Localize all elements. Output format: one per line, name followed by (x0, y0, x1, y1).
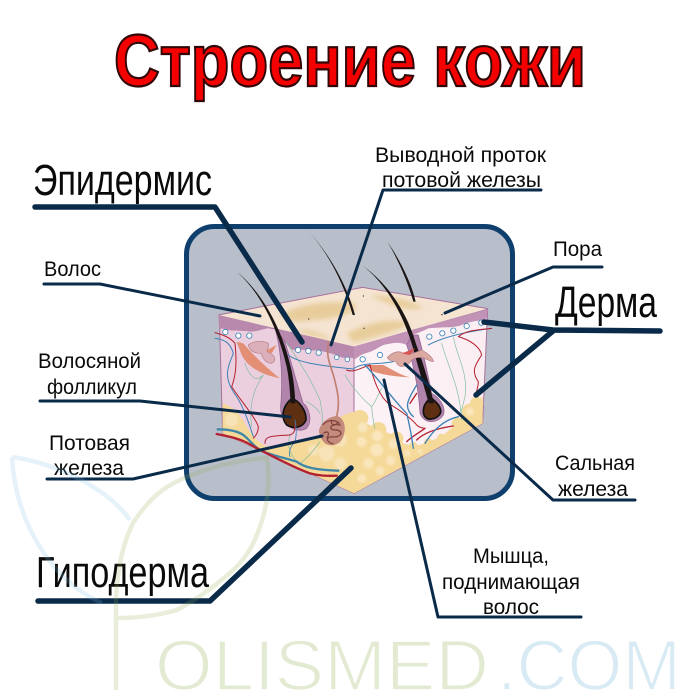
sweat duct (328, 342, 338, 417)
upper arteries (215, 328, 492, 443)
leader: hair follicle (40, 401, 290, 417)
sebaceous gland right (387, 350, 433, 366)
label: pore: Пора (553, 238, 602, 261)
tan skin patches (280, 295, 423, 343)
left hair shaft (235, 270, 295, 403)
top edge line (218, 287, 488, 315)
label: arrector muscle: волос (483, 596, 539, 619)
label: arrector muscle: поднимающая (442, 571, 580, 594)
heading: hypodermis: Гиподерма (36, 548, 209, 597)
label: sweat duct: потовой железы (382, 169, 541, 192)
watermark: logo leaves (12, 457, 268, 690)
label: hair follicle: фолликул (47, 376, 137, 399)
title: Строение кожи (114, 21, 586, 102)
watermark: site name (155, 627, 681, 700)
label: sweat gland: железа (54, 457, 124, 480)
left face hypodermis fat (223, 403, 354, 493)
left epidermis band (218, 315, 354, 358)
top face of skin (218, 287, 488, 347)
label: hair: Волос (44, 258, 101, 281)
right face dermis (354, 309, 488, 493)
lower left vein (289, 420, 296, 457)
label: sebaceous gland: железа (558, 478, 628, 501)
heading: dermis: Дерма (555, 278, 657, 327)
right face hypodermis fat (352, 397, 483, 493)
left follicle bulb (283, 400, 306, 427)
right follicle bulb (423, 398, 441, 419)
leader: hypodermis (38, 468, 351, 601)
right hair follicle (407, 335, 444, 422)
left face dermis (219, 317, 354, 493)
leader: arrector muscle (384, 380, 581, 617)
blood vessels and nerves (215, 320, 492, 476)
label: arrector muscle: Мышца, (473, 545, 549, 568)
heading: epidermis: Эпидермис (33, 156, 212, 205)
right epidermis band (354, 309, 488, 360)
large red vessel (217, 434, 337, 476)
left hair follicle (275, 328, 310, 430)
leader: epidermis (35, 207, 302, 342)
green nerves (245, 337, 466, 463)
leader: pore (445, 267, 602, 313)
label: sweat duct: Выводной проток (375, 144, 547, 167)
capillary loops (223, 320, 484, 362)
label: hair follicle: Волосяной (38, 350, 141, 373)
left fat lobules (225, 413, 347, 469)
large blue vessel (218, 429, 338, 471)
skin cross-section block (215, 229, 492, 493)
leader: sebaceous gland (405, 364, 635, 500)
leader: dermis (476, 322, 660, 395)
back hair shafts (307, 229, 416, 315)
lower right arteries (407, 393, 453, 442)
lower right veins (365, 365, 458, 448)
label: sweat gland: Потовая (49, 432, 130, 455)
upper veins (215, 328, 492, 437)
pores (308, 295, 443, 329)
leader lines (35, 190, 660, 617)
right hair shaft (362, 265, 434, 403)
leader: hair (44, 284, 260, 316)
panel: skin diagram background (186, 226, 512, 498)
leader: sweat gland (47, 436, 322, 479)
arrector pili muscles (237, 342, 415, 378)
sebaceous gland left (248, 341, 275, 363)
label: sebaceous gland: Сальная (555, 452, 635, 475)
leader: sweat duct (331, 190, 541, 345)
sweat gland (319, 416, 345, 445)
